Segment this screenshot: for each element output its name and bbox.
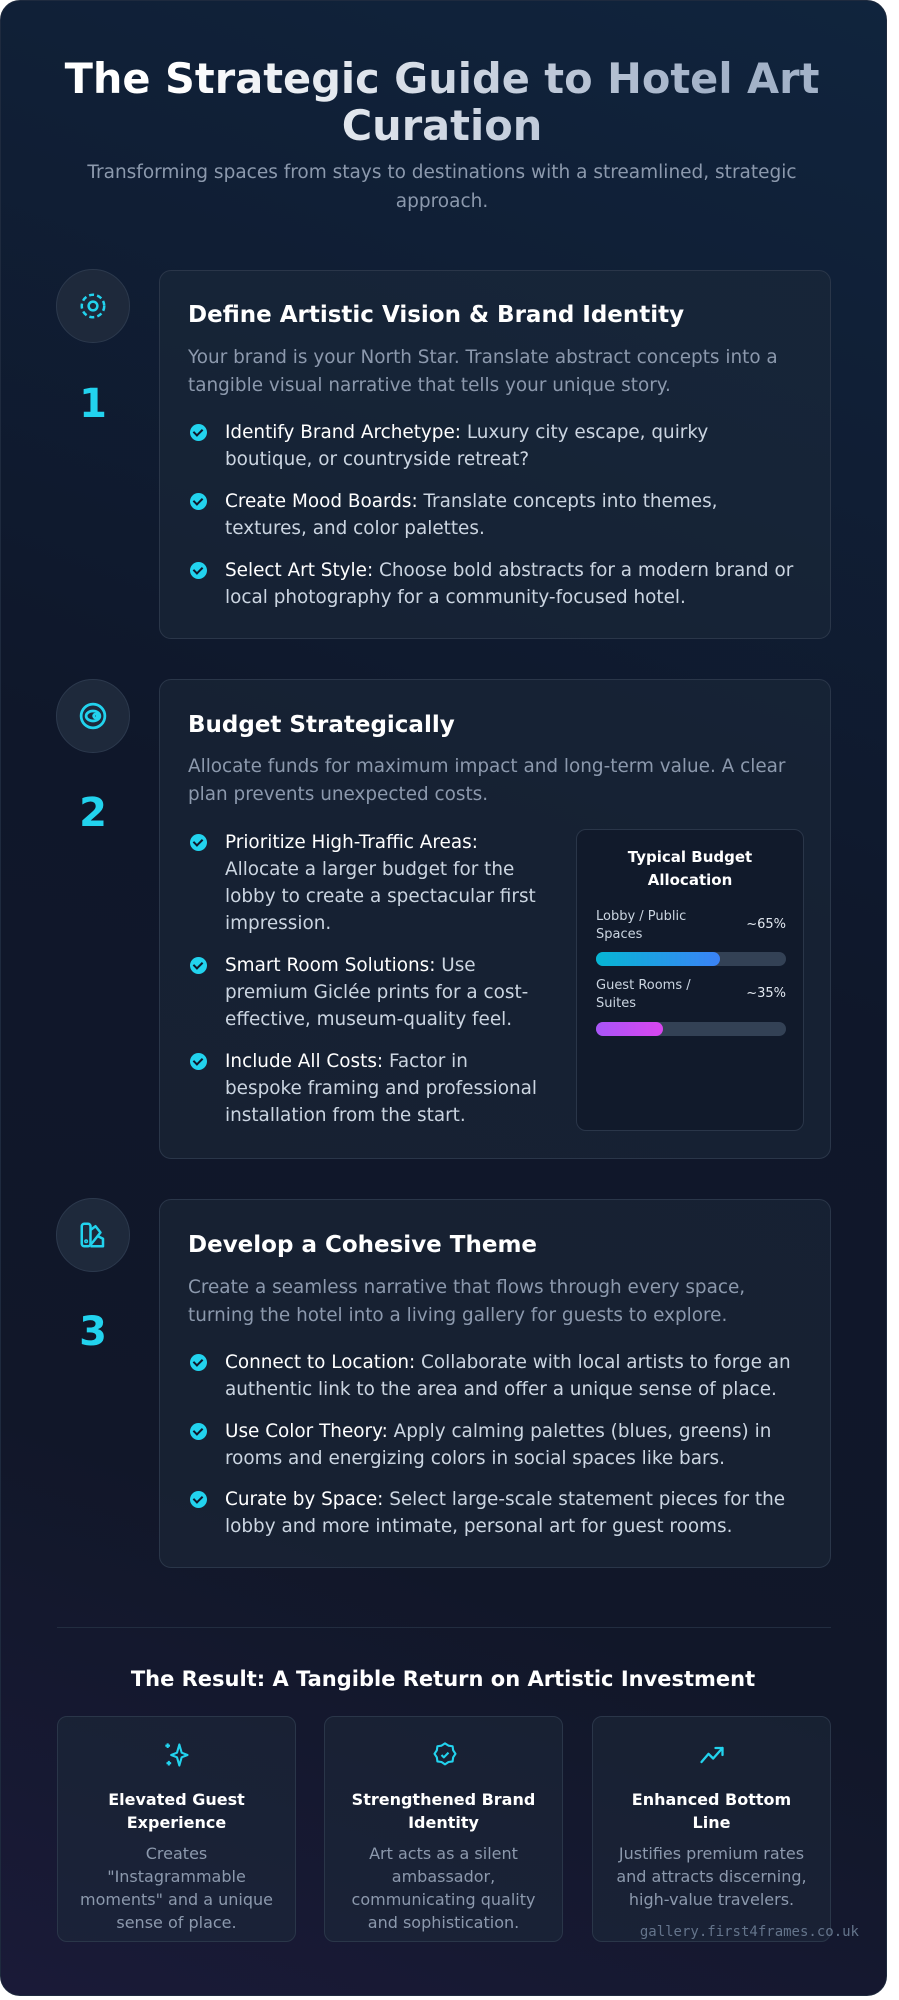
footer: gallery.first4frames.co.uk xyxy=(640,1924,859,1940)
result card: brand identity: Strengthened Brand xyxy=(352,1790,535,1809)
result card: guest experience: Creates xyxy=(146,1844,207,1863)
bullet 1b xyxy=(190,491,718,539)
bullet 1b: textures, and color palettes. xyxy=(225,518,485,539)
result card: bottom line: and attracts discerning, xyxy=(616,1867,807,1886)
result card: brand identity xyxy=(324,1716,563,1942)
bullet 1c: local photography for a community-focused hotel. xyxy=(225,587,686,608)
bullet 2b xyxy=(190,955,528,1030)
bullet 2c xyxy=(190,1051,537,1126)
bullet 1c xyxy=(190,560,794,608)
bullet 2c: bespoke framing and professional xyxy=(225,1078,537,1099)
result card: bottom line: high-value travelers. xyxy=(629,1890,794,1909)
bullet 2a: lobby to create a spectacular first xyxy=(225,886,536,907)
bar: guest rooms: Guest Rooms / xyxy=(596,978,691,993)
bullet 2a: Prioritize High-Traffic Areas: xyxy=(225,832,478,853)
result card: bottom line: Line xyxy=(693,1813,730,1832)
description 1 xyxy=(188,347,778,396)
chart title: Typical Budget xyxy=(628,848,752,866)
result heading: The Result: A Tangible Return on Artistic Investment xyxy=(131,1667,755,1691)
subtitle: approach. xyxy=(396,191,488,212)
title: The Strategic Guide to Hotel Art xyxy=(65,54,819,103)
result card: guest experience xyxy=(57,1716,296,1942)
subtitle xyxy=(87,162,797,212)
description 2 xyxy=(188,756,786,805)
heading 3: Develop a Cohesive Theme xyxy=(188,1232,537,1258)
bullet 1a: boutique, or countryside retreat? xyxy=(225,449,529,470)
subtitle: Transforming spaces from stays to destinations with a streamlined, strategic xyxy=(87,162,797,183)
description 1: Your brand is your North Star. Translate abstract concepts into a xyxy=(188,347,778,368)
panel: step 2 xyxy=(159,679,831,1159)
panel: step 3 xyxy=(159,1199,831,1568)
description 1: tangible visual narrative that tells your unique story. xyxy=(188,375,671,396)
result card: guest experience: Experience xyxy=(127,1813,226,1832)
bullet 2b: premium Giclée prints for a cost- xyxy=(225,982,528,1003)
bar: guest rooms: Suites xyxy=(596,996,636,1011)
bullet 3c xyxy=(190,1489,785,1537)
bullet 2a: impression. xyxy=(225,913,331,934)
result card: bottom line xyxy=(592,1716,831,1942)
bullet 2b: effective, museum-quality feel. xyxy=(225,1009,512,1030)
number 1: 1 xyxy=(79,381,107,427)
bullet 2a xyxy=(190,832,536,934)
icon: step 3 swatches xyxy=(56,1198,130,1272)
panel: step 1 xyxy=(159,270,831,639)
bullet 2c: installation from the start. xyxy=(225,1105,466,1126)
bullet 3b: rooms and energizing colors in social spaces like bars. xyxy=(225,1448,725,1469)
bullet 3c: Curate by Space: Select large-scale statement pieces for the xyxy=(225,1489,785,1510)
chart: budget allocation xyxy=(576,829,804,1131)
bullet 3a: authentic link to the area and offer a unique sense of place. xyxy=(225,1379,777,1400)
title: Curation xyxy=(342,101,542,150)
heading 1: Define Artistic Vision & Brand Identity xyxy=(188,302,684,328)
result card: brand identity: and sophistication. xyxy=(368,1913,519,1932)
icon: step 1 target xyxy=(56,269,130,343)
result card: guest experience: sense of place. xyxy=(116,1913,237,1932)
heading 2: Budget Strategically xyxy=(188,712,455,738)
bullet 2b: Smart Room Solutions: Use xyxy=(225,955,476,976)
bar: lobby: Spaces xyxy=(596,927,642,942)
result card: brand identity: Art acts as a silent xyxy=(369,1844,518,1863)
description 2: plan prevents unexpected costs. xyxy=(188,784,488,805)
number 3: 3 xyxy=(79,1309,107,1355)
bullet 3a xyxy=(190,1352,791,1400)
bullet 1b: Create Mood Boards: Translate concepts into themes, xyxy=(225,491,718,512)
icon: sparkles xyxy=(165,1743,188,1767)
result card: guest experience: moments" and a unique xyxy=(80,1890,273,1909)
result card: brand identity: Identity xyxy=(408,1813,479,1832)
icon: badge check xyxy=(434,1742,456,1766)
description 2: Allocate funds for maximum impact and long-term value. A clear xyxy=(188,756,785,777)
bar: guest rooms: ~35% xyxy=(746,986,786,1001)
bullet 2a: Allocate a larger budget for the xyxy=(225,859,514,880)
bar: lobby xyxy=(596,909,786,966)
bar: lobby: ~65% xyxy=(746,917,786,932)
description 3: Create a seamless narrative that flows through every space, xyxy=(188,1277,745,1298)
result card: bottom line: Enhanced Bottom xyxy=(632,1790,791,1809)
bullet 3b: Use Color Theory: Apply calming palettes (blues, greens) in xyxy=(225,1421,771,1442)
chart title: Allocation xyxy=(648,871,732,889)
bullet 3b xyxy=(190,1421,771,1469)
bar: guest rooms xyxy=(596,978,786,1036)
result card: brand identity: ambassador, xyxy=(392,1867,495,1886)
bullet 3c: lobby and more intimate, personal art for guest rooms. xyxy=(225,1516,732,1537)
bullet 3a: Connect to Location: Collaborate with local artists to forge an xyxy=(225,1352,791,1373)
description 3 xyxy=(188,1277,745,1326)
icon: step 2 palette xyxy=(56,679,130,753)
number 2: 2 xyxy=(79,790,107,836)
title xyxy=(0,55,884,149)
result card: brand identity: communicating quality xyxy=(352,1890,535,1909)
bullet 1a xyxy=(190,422,708,470)
result card: guest experience: Elevated Guest xyxy=(108,1790,245,1809)
icon: trend up xyxy=(700,1746,724,1764)
result card: guest experience: "Instagrammable xyxy=(107,1867,246,1886)
chart title xyxy=(628,848,752,889)
result card: bottom line: Justifies premium rates xyxy=(619,1844,804,1863)
bullet 1c: Select Art Style: Choose bold abstracts for a modern brand or xyxy=(225,560,793,581)
bullet 1a: Identify Brand Archetype: Luxury city escape, quirky xyxy=(225,422,708,443)
bullet 2c: Include All Costs: Factor in xyxy=(225,1051,468,1072)
description 3: turning the hotel into a living gallery for guests to explore. xyxy=(188,1305,727,1326)
bar: lobby: Lobby / Public xyxy=(596,909,686,924)
